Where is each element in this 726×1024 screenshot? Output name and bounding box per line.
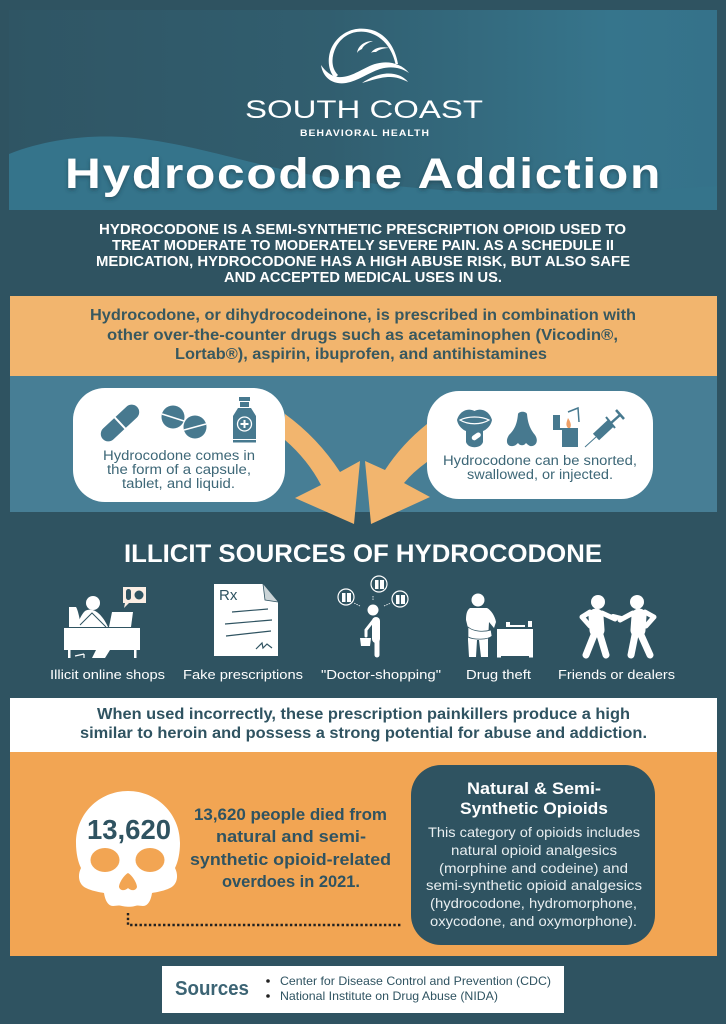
combination text: other over-the-counter drugs such as acetaminophen (Vicodin®, bbox=[107, 327, 618, 344]
icon: person and doctors bbox=[338, 576, 408, 655]
icon: lighter and spoon bbox=[553, 408, 579, 447]
source: online shops bbox=[50, 587, 166, 682]
arrow: right bbox=[365, 424, 430, 524]
statistic text: natural and semi- bbox=[216, 828, 366, 846]
sources heading: Sources bbox=[175, 978, 249, 1000]
sources list bbox=[266, 974, 551, 1003]
routes text: Hydrocodone can be snorted, bbox=[443, 453, 637, 468]
card: forms bbox=[73, 388, 285, 502]
card body: natural opioid analgesics bbox=[451, 842, 617, 858]
icon: tongue with pill bbox=[457, 410, 492, 447]
icon: capsule bbox=[97, 400, 143, 446]
icon: two people exchanging bbox=[582, 595, 654, 655]
forms text bbox=[103, 448, 255, 491]
sources row bbox=[50, 576, 676, 682]
icon: person at desk bbox=[64, 587, 146, 658]
arrow: left bbox=[285, 414, 360, 524]
logo bbox=[245, 29, 483, 139]
card body: semi-synthetic opioid analgesics bbox=[426, 877, 642, 893]
routes text bbox=[443, 453, 637, 482]
combination text: Lortab®), aspirin, ibuprofen, and antihistamines bbox=[175, 346, 547, 363]
statistic text: synthetic opioid-related bbox=[190, 851, 391, 869]
panel: header bbox=[9, 10, 717, 210]
heading: illicit sources: ILLICIT SOURCES OF HYDROCODONE bbox=[124, 540, 602, 568]
intro text: AND ACCEPTED MEDICAL USES IN US. bbox=[224, 269, 502, 286]
card heading bbox=[460, 780, 608, 818]
panel: combination drugs bbox=[10, 296, 717, 376]
icon: skull with number bbox=[76, 791, 180, 907]
source: friends or dealers bbox=[558, 595, 676, 682]
intro text: MEDICATION, HYDROCODONE HAS A HIGH ABUSE RISK, BUT ALSO SAFE bbox=[96, 253, 630, 270]
label: Drug theft bbox=[466, 667, 531, 682]
card body: oxycodone, and oxymorphone). bbox=[430, 913, 637, 929]
source: fake prescriptions bbox=[183, 584, 304, 682]
card heading: Natural & Semi- bbox=[467, 780, 601, 798]
logo mark bbox=[321, 29, 409, 83]
card: opioid definition bbox=[411, 765, 655, 945]
statistic text: 13,620 people died from bbox=[194, 806, 387, 824]
icon: skull with number: 13,620 bbox=[87, 814, 171, 845]
panel: forms and routes bbox=[10, 376, 717, 524]
intro text: TREAT MODERATE TO MODERATELY SEVERE PAIN. AS A SCHEDULE II bbox=[112, 237, 614, 254]
sources list: Center for Disease Control and Prevention (CDC) bbox=[280, 974, 551, 988]
icon: syringe bbox=[585, 410, 624, 447]
statistic text bbox=[190, 806, 391, 891]
icon: tablets bbox=[162, 406, 206, 438]
intro text: HYDROCODONE IS A SEMI-SYNTHETIC PRESCRIPTION OPIOID USED TO bbox=[99, 221, 626, 238]
card body bbox=[426, 824, 642, 929]
panel: sources bbox=[162, 966, 564, 1013]
card body: This category of opioids includes bbox=[428, 824, 640, 840]
warning text bbox=[80, 706, 647, 742]
source: drug theft bbox=[466, 594, 533, 682]
logo wordmark: SOUTH COAST bbox=[245, 96, 483, 124]
sources list: National Institute on Drug Abuse (NIDA) bbox=[280, 989, 498, 1003]
combination text: Hydrocodone, or dihydrocodeinone, is prescribed in combination with bbox=[90, 307, 636, 324]
combination text bbox=[90, 307, 636, 363]
forms text: Hydrocodone comes in bbox=[103, 448, 255, 463]
card body: (morphine and codeine) and bbox=[439, 860, 628, 876]
label: Fake prescriptions bbox=[183, 667, 304, 682]
label: "Doctor-shopping" bbox=[321, 667, 441, 682]
dotted connector bbox=[128, 913, 401, 925]
label: Illicit online shops bbox=[50, 667, 166, 682]
panel: overdose statistics bbox=[10, 752, 717, 956]
card heading: Synthetic Opioids bbox=[460, 800, 608, 818]
panel: warning bbox=[10, 698, 717, 752]
card body: (hydrocodone, hydromorphone, bbox=[430, 895, 637, 911]
statistic text: overdoes in 2021. bbox=[222, 873, 360, 891]
forms text: tablet, and liquid. bbox=[122, 476, 235, 491]
intro text bbox=[96, 221, 630, 286]
card: routes bbox=[427, 391, 653, 499]
label: Friends or dealers bbox=[558, 667, 676, 682]
source: doctor shopping bbox=[321, 576, 441, 682]
routes text: swallowed, or injected. bbox=[467, 467, 613, 482]
icon: thief at counter bbox=[466, 594, 533, 658]
warning text: similar to heroin and possess a strong potential for abuse and addiction. bbox=[80, 725, 647, 742]
title: Hydrocodone Addiction bbox=[65, 150, 662, 198]
forms text: the form of a capsule, bbox=[107, 462, 251, 477]
icon: nose bbox=[507, 412, 537, 446]
icon: prescription page: Rx bbox=[219, 587, 238, 604]
logo tagline: BEHAVIORAL HEALTH bbox=[300, 128, 430, 139]
warning text: When used incorrectly, these prescription painkillers produce a high bbox=[97, 706, 630, 723]
icon: liquid bottle bbox=[233, 397, 256, 442]
